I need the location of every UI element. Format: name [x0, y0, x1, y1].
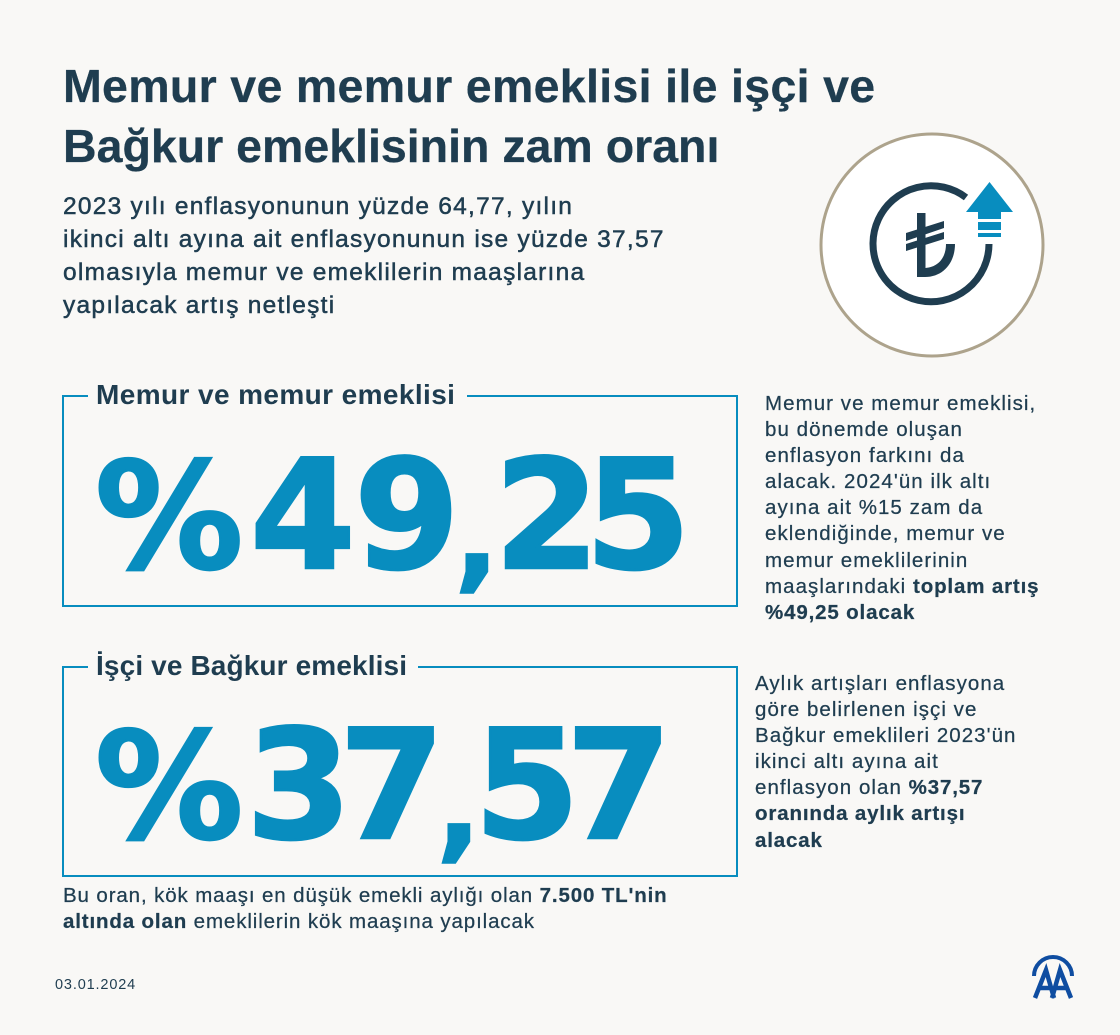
- icon: AA logo: [1032, 955, 1074, 999]
- big percentage: %: [95, 431, 243, 603]
- note: İşçi: oranında aylık artışı: [755, 802, 965, 825]
- big percentage: 5: [585, 427, 691, 604]
- date: 03.01.2024: [55, 977, 136, 993]
- footnote: [63, 884, 668, 933]
- title: Memur ve memur emeklisi ile işçi ve: [63, 60, 875, 112]
- big percentage: 3: [246, 697, 352, 874]
- big percentage: [95, 427, 691, 604]
- note: İşçi: Bağkur emeklileri 2023'ün: [755, 724, 1016, 747]
- big percentage: 7: [339, 697, 445, 874]
- note: Memur: [765, 392, 1039, 624]
- note: İşçi: ikinci altı ayına ait: [755, 750, 939, 773]
- title: [63, 60, 875, 172]
- note: İşçi: Aylık artışları enflasyona: [755, 672, 1005, 695]
- note: İşçi: [754, 672, 1016, 852]
- note: İşçi: alacak: [755, 829, 823, 852]
- panel: Memur ve memur emeklisi: [62, 379, 738, 607]
- note: Memur: maaşlarındaki toplam artış: [765, 575, 1039, 598]
- note: İşçi: göre belirlenen işçi ve: [755, 698, 977, 721]
- footnote: altında olan emeklilerin kök maaşına yapılacak: [63, 910, 535, 933]
- panel heading: İşçi ve Bağkur emeklisi: [96, 650, 407, 681]
- big percentage: 4: [250, 427, 356, 604]
- note: Memur: memur emeklilerinin: [765, 549, 968, 572]
- note: Memur: ayına ait %15 zam da: [765, 496, 983, 519]
- subtitle text: yapılacak artış netleşti: [63, 292, 335, 319]
- panel heading: Memur ve memur emeklisi: [96, 379, 455, 410]
- note: Memur: alacak. 2024'ün ilk altı: [765, 470, 991, 493]
- icon: lira with rising arrow: [820, 132, 1044, 358]
- footnote: Bu oran, kök maaşı en düşük emekli aylığı olan 7.500 TL'nin: [63, 884, 668, 907]
- note: Memur: %49,25 olacak: [765, 601, 915, 624]
- title: Bağkur emeklisinin zam oranı: [63, 120, 719, 172]
- subtitle text: [62, 193, 665, 319]
- big percentage: 9: [354, 427, 460, 604]
- big percentage: [95, 697, 672, 874]
- panel: İşçi ve Bağkur emeklisi: [62, 650, 738, 877]
- note: İşçi: enflasyon olan %37,57: [755, 776, 983, 799]
- note: Memur: bu dönemde oluşan: [765, 418, 963, 441]
- big percentage: 2: [494, 427, 600, 604]
- subtitle text: 2023 yılı enflasyonunun yüzde 64,77, yılın: [63, 193, 573, 220]
- big percentage: 5: [474, 697, 580, 874]
- big percentage: ,: [455, 470, 499, 604]
- subtitle text: olmasıyla memur ve emeklilerin maaşlarına: [63, 259, 585, 286]
- big percentage: %: [95, 701, 243, 873]
- note: Memur: Memur ve memur emeklisi,: [765, 392, 1036, 415]
- note: Memur: enflasyon farkını da: [765, 444, 965, 467]
- subtitle text: ikinci altı ayına ait enflasyonunun ise yüzde 37,57: [63, 226, 665, 253]
- note: Memur: eklendiğinde, memur ve: [765, 522, 1006, 545]
- big percentage: ,: [437, 740, 481, 874]
- big percentage: 7: [566, 697, 672, 874]
